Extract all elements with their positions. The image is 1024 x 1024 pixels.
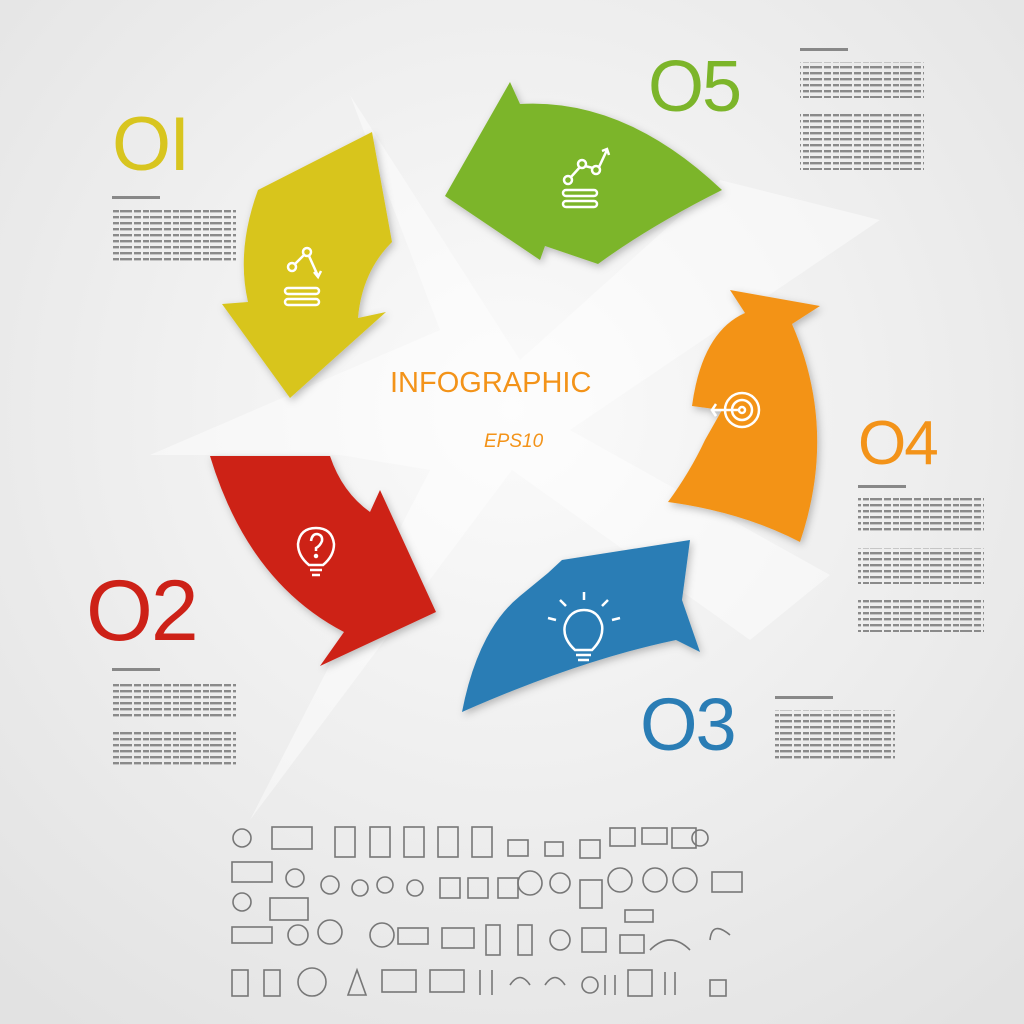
number 03: O3 [640,683,735,766]
arrow: orange 04 [668,290,820,542]
icon: chart up [563,149,609,207]
text block 01 [112,196,236,262]
arrow: green 05 [445,82,722,264]
text block 04 [858,485,984,632]
icon: chart down [285,248,321,305]
text block 02 [112,668,236,768]
text block 03 [775,696,895,760]
arrow: red 02 [210,456,436,666]
title: INFOGRAPHIC [390,367,591,399]
number 02: O2 [86,563,197,659]
number 05: O5 [648,47,740,127]
number 01: OI [112,102,188,187]
paper folds [150,95,880,820]
text block 05 [800,48,924,170]
icon set [232,827,742,996]
subtitle: EPS10 [484,431,544,452]
icon: target [712,393,759,427]
arrow: blue 03 [462,540,700,712]
icon: question bulb [298,528,334,575]
icon: bulb rays [548,592,620,660]
number 04: O4 [858,409,937,478]
arrow: yellow 01 [222,132,392,398]
